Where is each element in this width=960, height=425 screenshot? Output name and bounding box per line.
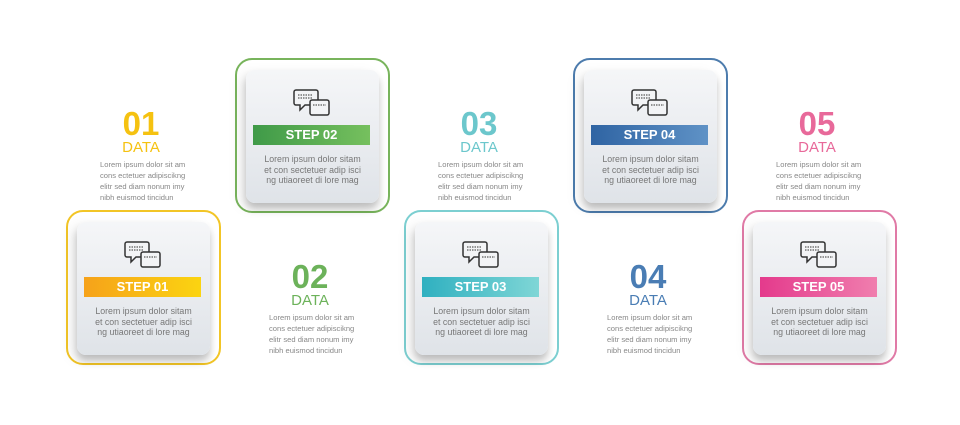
step 03 panel	[404, 210, 559, 365]
banner: STEP 01: STEP 01	[117, 279, 168, 294]
banner: STEP 02: STEP 02	[286, 127, 337, 142]
banner: STEP 04	[591, 125, 708, 145]
data: 05	[776, 105, 861, 202]
data: 03: nibh euismod tincidun	[438, 193, 511, 202]
data: 01: Lorem ipsum dolor sit am	[100, 160, 185, 169]
data: 05: DATA	[798, 139, 836, 156]
icon: chat	[124, 241, 161, 268]
text: et con sectetuer adip isci	[602, 164, 699, 174]
data: 02	[269, 258, 354, 355]
text	[433, 306, 530, 337]
icon: chat	[631, 89, 668, 116]
data: 01	[100, 105, 185, 202]
banner: STEP 03	[422, 277, 539, 297]
data: 02: DATA	[291, 292, 329, 309]
text: Lorem ipsum dolor sitam	[771, 306, 868, 316]
text: ng utiaoreet di lore mag	[435, 327, 528, 337]
text	[602, 154, 699, 185]
data: 04: Lorem ipsum dolor sit am	[607, 313, 692, 322]
banner: STEP 02	[253, 125, 370, 145]
text: ng utiaoreet di lore mag	[266, 175, 359, 185]
data: 01: nibh euismod tincidun	[100, 193, 173, 202]
banner: STEP 05	[760, 277, 877, 297]
text: Lorem ipsum dolor sitam	[264, 154, 361, 164]
banner: STEP 01	[84, 277, 201, 297]
step 04 panel	[573, 58, 728, 213]
data: 04: elitr sed diam nonum imy	[607, 335, 691, 344]
text: ng utiaoreet di lore mag	[773, 327, 866, 337]
text	[264, 154, 361, 185]
data: 03: elitr sed diam nonum imy	[438, 182, 522, 191]
data: 02: nibh euismod tincidun	[269, 346, 342, 355]
data: 02: Lorem ipsum dolor sit am	[269, 313, 354, 322]
data: 02: elitr sed diam nonum imy	[269, 335, 353, 344]
step 02 panel	[235, 58, 390, 213]
data: 05: cons ectetuer adipiscikng	[776, 171, 861, 180]
icon: chat	[293, 89, 330, 116]
banner: STEP 05: STEP 05	[793, 279, 844, 294]
data: 04: cons ectetuer adipiscikng	[607, 324, 692, 333]
icon: chat	[800, 241, 837, 268]
text	[95, 306, 192, 337]
data: 01: DATA	[122, 139, 160, 156]
data: 05: elitr sed diam nonum imy	[776, 182, 860, 191]
data: 05: nibh euismod tincidun	[776, 193, 849, 202]
data: 03: 03	[461, 105, 497, 142]
text	[771, 306, 868, 337]
step 01 panel	[66, 210, 221, 365]
text: et con sectetuer adip isci	[771, 316, 868, 326]
data: 03	[438, 105, 523, 202]
text: et con sectetuer adip isci	[264, 164, 361, 174]
text: et con sectetuer adip isci	[433, 316, 530, 326]
data: 01: 01	[123, 105, 159, 142]
text: Lorem ipsum dolor sitam	[95, 306, 192, 316]
data: 01: elitr sed diam nonum imy	[100, 182, 184, 191]
data: 04: 04	[630, 258, 666, 295]
data: 03: DATA	[460, 139, 498, 156]
text: ng utiaoreet di lore mag	[604, 175, 697, 185]
text: et con sectetuer adip isci	[95, 316, 192, 326]
text: ng utiaoreet di lore mag	[97, 327, 190, 337]
data: 04	[607, 258, 692, 355]
text: Lorem ipsum dolor sitam	[602, 154, 699, 164]
data: 01: cons ectetuer adipiscikng	[100, 171, 185, 180]
banner: STEP 04: STEP 04	[624, 127, 675, 142]
data: 05: Lorem ipsum dolor sit am	[776, 160, 861, 169]
text: Lorem ipsum dolor sitam	[433, 306, 530, 316]
step 05 panel	[742, 210, 897, 365]
data: 02: cons ectetuer adipiscikng	[269, 324, 354, 333]
icon: chat	[462, 241, 499, 268]
data: 02: 02	[292, 258, 328, 295]
data: 04: nibh euismod tincidun	[607, 346, 680, 355]
data: 03: cons ectetuer adipiscikng	[438, 171, 523, 180]
data: 04: DATA	[629, 292, 667, 309]
banner: STEP 03: STEP 03	[455, 279, 506, 294]
data: 03: Lorem ipsum dolor sit am	[438, 160, 523, 169]
data: 05: 05	[799, 105, 835, 142]
